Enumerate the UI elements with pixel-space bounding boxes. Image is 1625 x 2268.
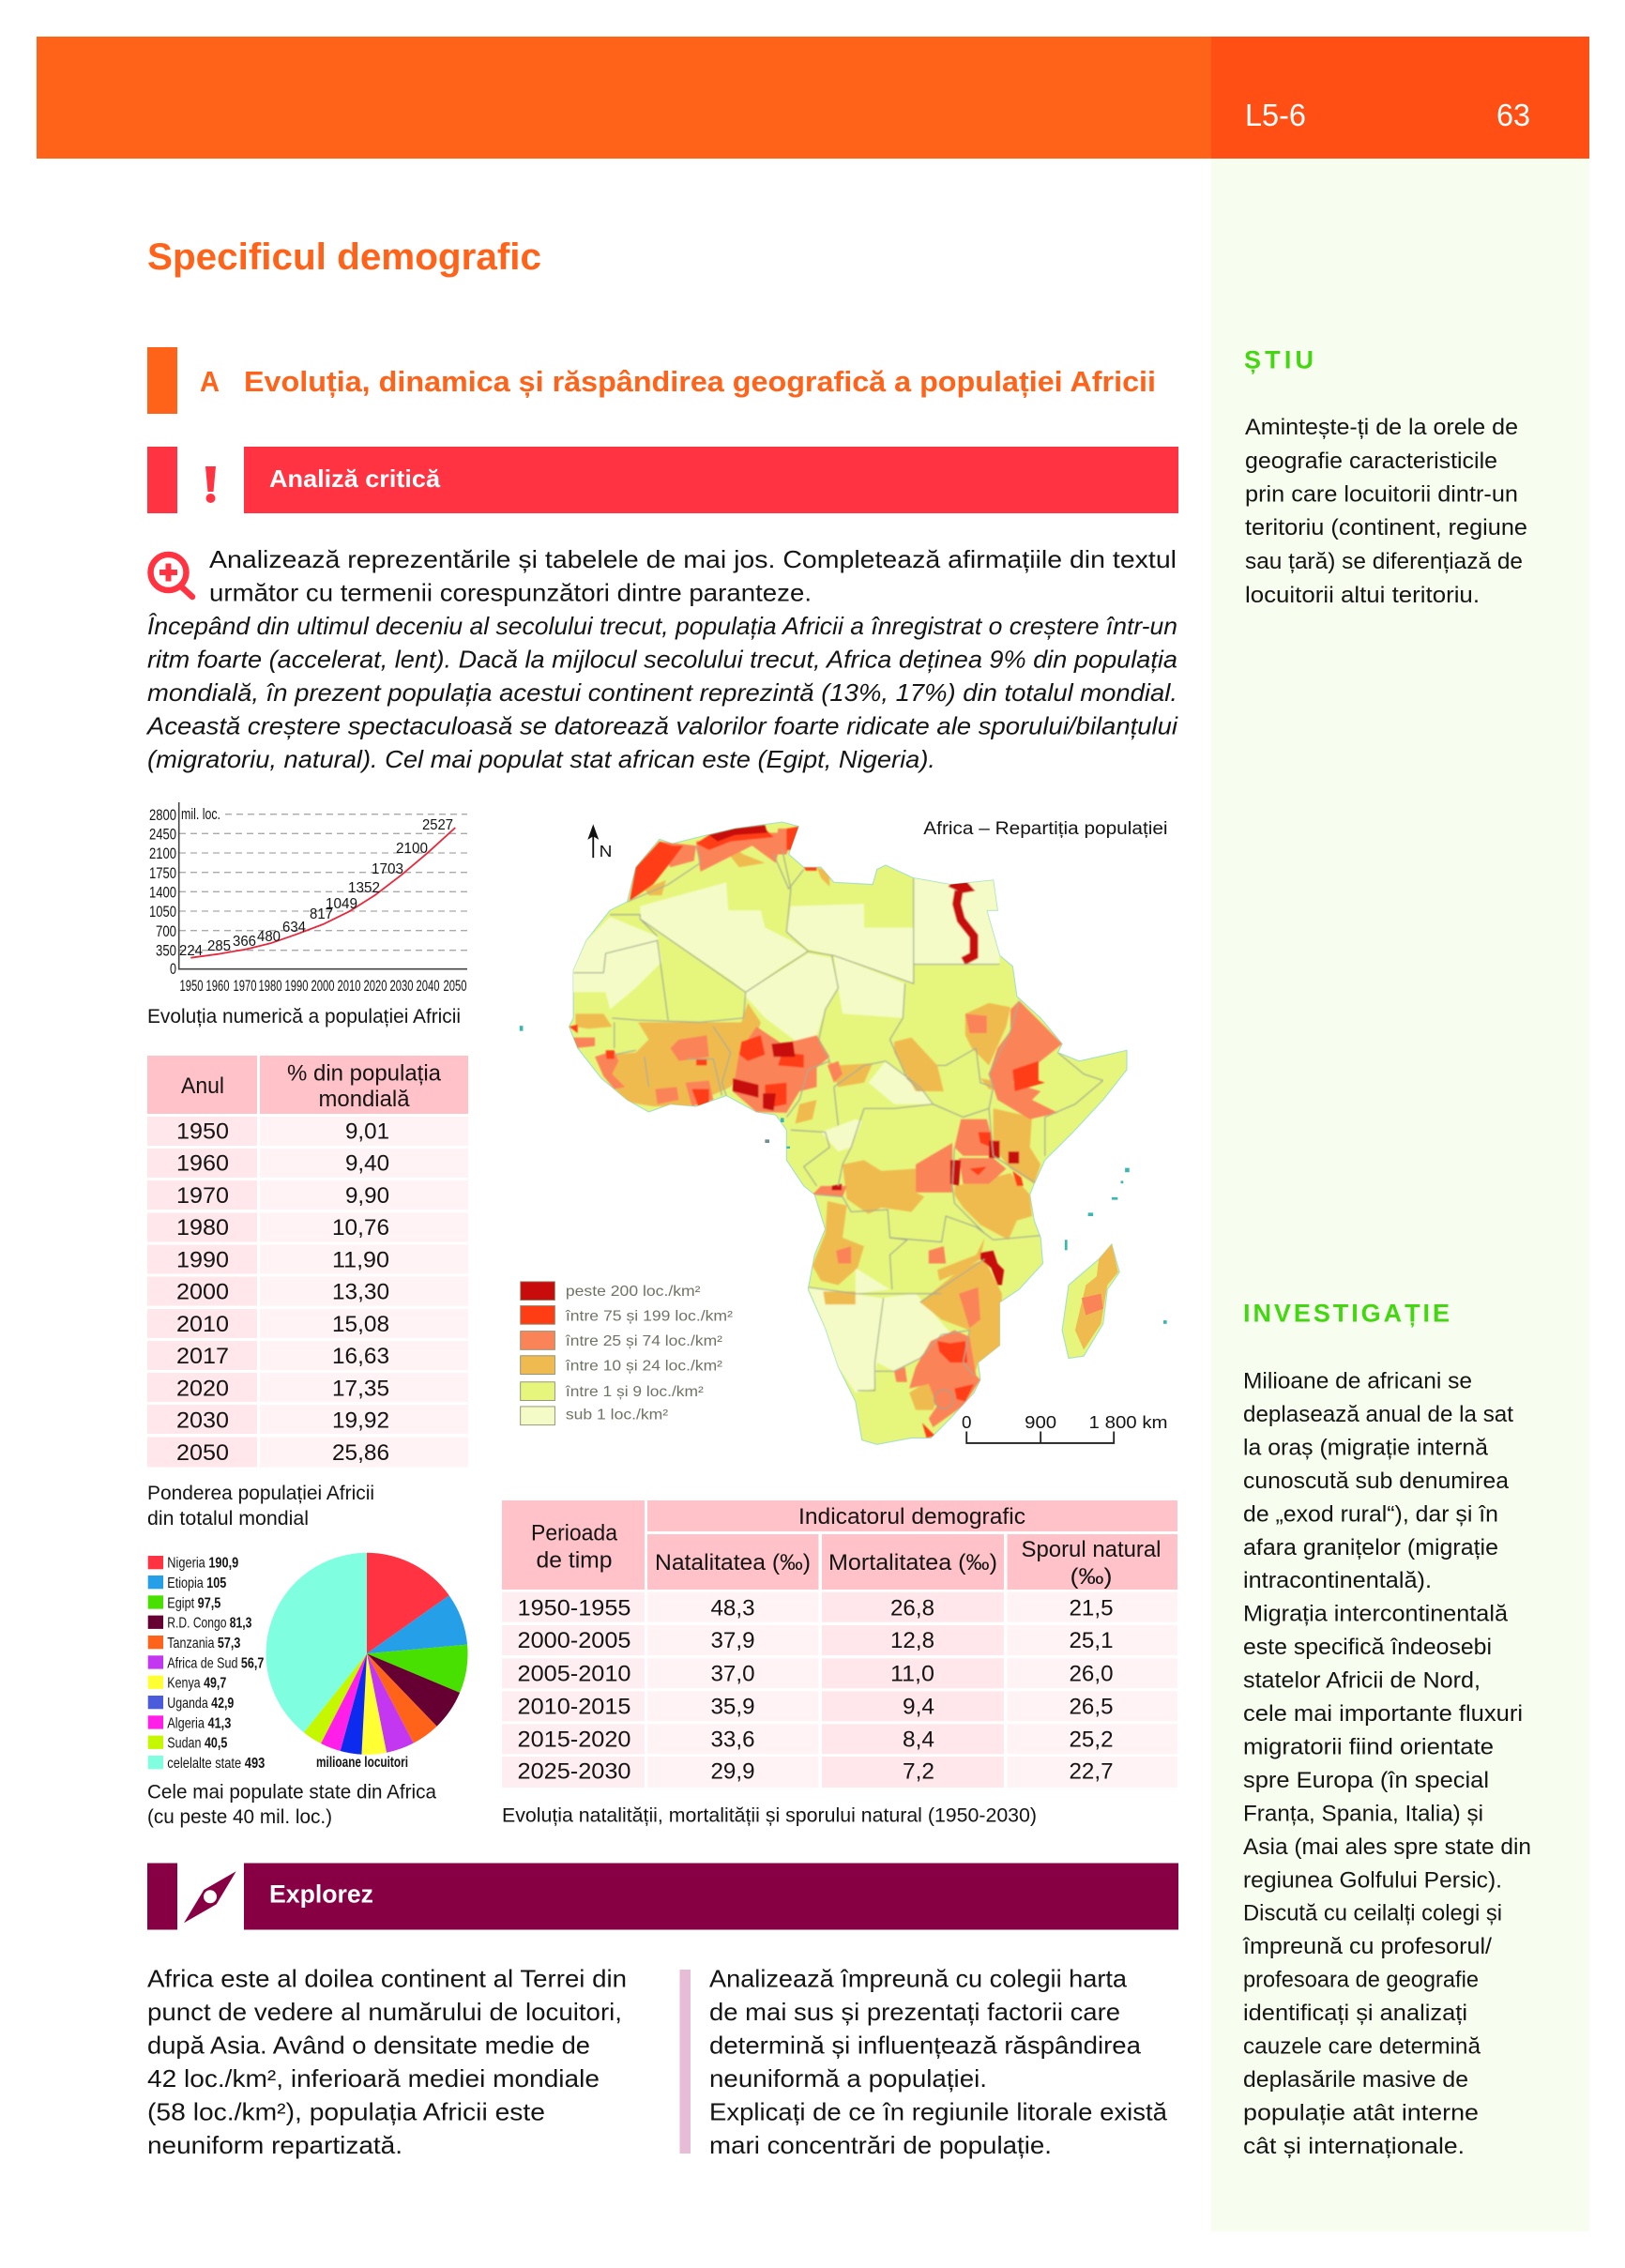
table: share of world population: 2000 xyxy=(176,1280,229,1305)
table: demographic indicators: Perioada xyxy=(531,1521,618,1546)
explore text right: Explicați de ce în regiunile litorale există xyxy=(709,2098,1168,2126)
map legend xyxy=(521,1282,733,1425)
sidebar text: INVESTIGAȚIE: identificați și analizați xyxy=(1243,2001,1467,2026)
top banner xyxy=(37,37,1589,159)
table: share of world population: 9,40 xyxy=(345,1151,389,1177)
sidebar text: INVESTIGAȚIE: Asia (mai ales spre state din xyxy=(1243,1834,1531,1860)
sidebar text: ȘTIU: locuitorii altui teritoriu. xyxy=(1245,583,1480,608)
line chart: population growth: 817 xyxy=(310,906,333,922)
density regions xyxy=(570,825,1103,1438)
line chart: population growth: 2030 xyxy=(390,977,413,995)
sidebar text: INVESTIGAȚIE: împreună cu profesorul/ xyxy=(1242,1934,1492,1959)
table: demographic indicators: 37,0 xyxy=(711,1662,754,1687)
north arrow: N xyxy=(600,842,612,860)
sidebar text: INVESTIGAȚIE: statelor Africii de Nord, xyxy=(1243,1668,1481,1693)
table: share of world population: 1990 xyxy=(176,1247,229,1272)
line chart: population growth: 2010 xyxy=(338,977,360,995)
line chart: population growth: 2050 xyxy=(443,977,467,995)
explore text left: punct de vedere al numărului de locuitori, xyxy=(147,1998,622,2026)
sidebar text: INVESTIGAȚIE: spre Europa (în special xyxy=(1243,1768,1489,1793)
scale bar xyxy=(962,1412,1168,1443)
icon: magnifier xyxy=(150,555,192,597)
map legend: sub 1 loc./km² xyxy=(566,1408,668,1423)
sidebar text: INVESTIGAȚIE xyxy=(1242,1368,1531,2159)
sidebar text: ȘTIU: teritoriu (continent, regiune xyxy=(1245,515,1527,540)
table: share of world population: Anul xyxy=(181,1073,224,1099)
table: share of world population: mondială xyxy=(319,1087,410,1112)
line chart: population growth: 2450 xyxy=(149,826,176,843)
sidebar text: INVESTIGAȚIE: Migrația intercontinentală xyxy=(1243,1602,1509,1627)
table: share of world population: 1960 xyxy=(176,1151,229,1177)
explore text right: determină și influențează răspândirea xyxy=(709,2031,1142,2059)
table: share of world population: % din populația xyxy=(287,1060,442,1087)
top banner: 63 xyxy=(1496,98,1530,132)
pie chart: most populated states xyxy=(266,1553,468,1771)
intro instructions: Analizează reprezentările și tabelele de mai jos. Completează afirmațiile din textul xyxy=(209,545,1177,573)
title: Specificul demografic xyxy=(147,236,541,278)
table: demographic indicators: 8,4 xyxy=(903,1728,934,1753)
table: demographic indicators: Natalitatea (‰) xyxy=(655,1550,811,1575)
pie caption: Cele mai populate state din Africa xyxy=(147,1782,436,1804)
banner: Explorez: Explorez xyxy=(269,1880,373,1909)
sidebar text: INVESTIGAȚIE: intracontinentală). xyxy=(1243,1568,1432,1593)
pie legend: Uganda 42,9 xyxy=(167,1696,234,1712)
map legend: între 1 și 9 loc./km² xyxy=(565,1384,704,1400)
side panel background xyxy=(1211,159,1589,2231)
line chart: population growth: 1950 xyxy=(180,977,203,995)
chart caption: Evoluția numerică a populației Africii xyxy=(147,1006,461,1027)
line chart: population growth: 366 xyxy=(233,934,256,950)
section heading A xyxy=(147,347,1156,414)
line chart: population growth: 634 xyxy=(282,920,306,936)
intro instructions: următor cu termenii corespunzători dintre paranteze. xyxy=(209,578,812,606)
pie legend: Nigeria 190,9 xyxy=(167,1556,238,1572)
Madagascar xyxy=(1062,1244,1119,1359)
sidebar text: INVESTIGAȚIE: deplasările masive de xyxy=(1243,2067,1468,2093)
table: share of world population: 25,86 xyxy=(332,1440,389,1466)
explore text left: Africa este al doilea continent al Terrei din xyxy=(147,1965,627,1993)
pie legend: Kenya 49,7 xyxy=(167,1676,226,1692)
table: demographic indicators: 21,5 xyxy=(1070,1596,1113,1621)
intro instructions xyxy=(209,545,1177,606)
italic exercise text: ritm foarte (accelerat, lent). Dacă la mijlocul secolului trecut, Africa deținea 9% din populația xyxy=(147,646,1177,674)
line chart: population growth: 1750 xyxy=(149,864,176,882)
section heading A: Evoluția, dinamica și răspândirea geografică a populației Africii xyxy=(244,365,1156,398)
sidebar heading: INVESTIGAȚIE: INVESTIGAȚIE xyxy=(1243,1299,1450,1327)
italic exercise text: Începând din ultimul deceniu al secolului trecut, populația Africii a înregistrat o creștere într-un xyxy=(147,612,1177,640)
sidebar text: INVESTIGAȚIE: cât și internaționale. xyxy=(1243,2134,1465,2159)
explore text left: neuniform repartizată. xyxy=(147,2131,402,2159)
table: share of world population: 1950 xyxy=(176,1119,229,1144)
map legend: între 25 și 74 loc./km² xyxy=(565,1333,722,1349)
pie legend: Tanzania 57,3 xyxy=(167,1636,240,1652)
sidebar text: INVESTIGAȚIE: afara granițelor (migrație xyxy=(1243,1535,1498,1560)
sidebar text: INVESTIGAȚIE: profesoara de geografie xyxy=(1243,1968,1479,1993)
scale bar: 900 xyxy=(1025,1412,1056,1432)
line chart: population growth: 2527 xyxy=(422,817,453,833)
sidebar text: INVESTIGAȚIE: cele mai importante fluxuri xyxy=(1243,1701,1523,1727)
line chart: population growth: 1980 xyxy=(259,977,281,995)
sidebar text: INVESTIGAȚIE: Franța, Spania, Italia) și xyxy=(1243,1801,1483,1826)
line chart: population growth: 224 xyxy=(179,943,203,959)
explore text left: (58 loc./km²), populația Africii este xyxy=(147,2098,545,2126)
sidebar text: INVESTIGAȚIE: la oraș (migrație internă xyxy=(1243,1436,1489,1460)
sidebar text: INVESTIGAȚIE: Discută cu ceilalți colegi și xyxy=(1243,1901,1502,1926)
table: share of world population: 9,90 xyxy=(345,1183,389,1209)
sidebar text: INVESTIGAȚIE: Milioane de africani se xyxy=(1243,1368,1472,1394)
pie legend xyxy=(148,1556,265,1772)
line chart: population growth: 2040 xyxy=(417,977,439,995)
sidebar text: INVESTIGAȚIE: populație atât interne xyxy=(1243,2100,1479,2125)
line chart: population growth: mil. loc. xyxy=(181,805,220,823)
table: demographic indicators: 2015-2020 xyxy=(518,1728,630,1753)
explore text right: Analizează împreună cu colegii harta xyxy=(709,1965,1128,1993)
sidebar text: INVESTIGAȚIE: de „exod rural“), dar și în xyxy=(1243,1501,1498,1527)
country borders xyxy=(573,845,1103,1391)
small islands xyxy=(520,1026,1167,1324)
table: demographic indicators: 2005-2010 xyxy=(518,1662,630,1687)
divider bar xyxy=(679,1970,691,2154)
explore text right: mari concentrări de populație. xyxy=(709,2131,1052,2159)
table: demographic indicators: 12,8 xyxy=(890,1628,934,1653)
table: demographic indicators: 33,6 xyxy=(711,1728,754,1753)
table: demographic indicators: 1950-1955 xyxy=(518,1596,630,1621)
line chart: population growth: 1050 xyxy=(149,903,176,921)
table: demographic indicators xyxy=(502,1500,1177,1788)
table: demographic indicators: Sporul natural xyxy=(1021,1537,1162,1562)
explore text right xyxy=(709,1965,1168,2159)
sidebar text: ȘTIU: prin care locuitorii dintr-un xyxy=(1245,482,1518,507)
pie caption xyxy=(147,1782,436,1828)
table: demographic indicators: 2000-2005 xyxy=(518,1628,630,1653)
line chart: population growth: 1703 xyxy=(372,861,403,877)
table: share of world population: 2020 xyxy=(176,1376,229,1401)
italic exercise text: mondială, în prezent populația acestui continent reprezintă (13%, 17%) din totalul mondial. xyxy=(147,678,1177,707)
line chart: population growth: 350 xyxy=(156,942,176,959)
table: demographic indicators: 26,8 xyxy=(890,1596,934,1621)
table: share of world population: 16,63 xyxy=(332,1344,389,1369)
table: demographic indicators: 7,2 xyxy=(903,1759,934,1785)
line chart: population growth: 1400 xyxy=(149,884,176,901)
table: share of world population: 15,08 xyxy=(332,1312,389,1337)
explore text right: neuniformă a populației. xyxy=(709,2064,987,2093)
sidebar text: ȘTIU: geografie caracteristicile xyxy=(1245,449,1497,474)
italic exercise text: Această creștere spectaculoasă se datorează valorilor foarte ridicate ale sporului/bilanțului xyxy=(145,711,1178,739)
table: share of world population: 17,35 xyxy=(332,1376,389,1401)
table: demographic indicators: 2010-2015 xyxy=(518,1695,630,1720)
line chart: population growth: 1990 xyxy=(285,977,308,995)
italic exercise text xyxy=(145,612,1178,773)
table: demographic indicators: 22,7 xyxy=(1070,1759,1113,1785)
sidebar text: INVESTIGAȚIE: deplasează anual de la sat xyxy=(1243,1402,1513,1427)
table: demographic indicators: Indicatorul demografic xyxy=(798,1504,1025,1530)
table: share of world population: 9,01 xyxy=(345,1119,389,1144)
table: share of world population: 1980 xyxy=(176,1215,229,1241)
line chart: population growth: 480 xyxy=(257,929,281,945)
line chart: population growth: 1960 xyxy=(206,977,229,995)
section heading A: A xyxy=(200,365,220,398)
table: share of world population: 1970 xyxy=(176,1183,229,1209)
sidebar text: INVESTIGAȚIE: migratorii fiind orientate xyxy=(1243,1734,1494,1760)
table: demographic indicators: (‰) xyxy=(1070,1564,1113,1590)
line chart: population growth xyxy=(149,802,467,995)
sidebar text: INVESTIGAȚIE: este specifică îndeosebi xyxy=(1243,1635,1492,1660)
table: share of world population: 10,76 xyxy=(332,1215,389,1241)
pie legend: Africa de Sud 56,7 xyxy=(167,1655,264,1671)
table: share of world population: 19,92 xyxy=(332,1408,389,1434)
sidebar heading: ȘTIU: ȘTIU xyxy=(1244,345,1314,373)
table: demographic indicators: 9,4 xyxy=(903,1695,934,1720)
pie legend: Etiopia 105 xyxy=(167,1575,226,1591)
north arrow xyxy=(587,824,612,860)
sidebar text: INVESTIGAȚIE: regiunea Golfului Persic). xyxy=(1243,1867,1502,1893)
explore text left: după Asia. Având o densitate medie de xyxy=(147,2031,590,2059)
pie legend: Sudan 40,5 xyxy=(167,1736,227,1752)
table: demographic indicators: 11,0 xyxy=(890,1662,934,1687)
line chart: population growth: 1049 xyxy=(326,896,357,912)
table caption: Ponderea populației Africii xyxy=(147,1483,374,1504)
line chart: population growth: 700 xyxy=(156,922,176,940)
line chart: population growth: 1970 xyxy=(233,977,257,995)
table: demographic indicators: 25,1 xyxy=(1070,1628,1113,1653)
line chart: population growth: 285 xyxy=(207,938,231,954)
line chart: population growth: 2100 xyxy=(149,845,176,862)
explore text left xyxy=(147,1965,627,2159)
pie legend: Egipt 97,5 xyxy=(167,1595,220,1611)
map legend: între 75 și 199 loc./km² xyxy=(565,1309,733,1325)
table: share of world population: 2017 xyxy=(176,1344,229,1369)
line chart: population growth: 0 xyxy=(170,960,176,978)
sidebar text: ȘTIU xyxy=(1245,415,1527,608)
sidebar text: ȘTIU: sau țară) se diferențiază de xyxy=(1245,549,1523,574)
pie legend: celelalte state 493 xyxy=(167,1756,265,1772)
banner: Analiză critică: Analiză critică xyxy=(269,464,441,493)
line chart: population growth: 2800 xyxy=(149,806,176,824)
line chart: population growth: 2020 xyxy=(364,977,387,995)
table: share of world population: 13,30 xyxy=(332,1280,389,1305)
line chart: population growth: 2100 xyxy=(396,841,428,857)
table: demographic indicators: 35,9 xyxy=(711,1695,754,1720)
pie legend: R.D. Congo 81,3 xyxy=(167,1616,251,1632)
table: demographic indicators: 25,2 xyxy=(1070,1728,1113,1753)
table: demographic indicators: 2025-2030 xyxy=(518,1759,630,1785)
table: demographic indicators: 26,5 xyxy=(1070,1695,1113,1720)
continent fill xyxy=(570,822,1127,1444)
map: Africa population density xyxy=(520,818,1168,1444)
map legend: peste 200 loc./km² xyxy=(566,1284,701,1300)
table: share of world population: 2050 xyxy=(176,1440,229,1466)
table: demographic indicators: 48,3 xyxy=(711,1596,754,1621)
top banner: L5-6 xyxy=(1245,98,1306,132)
explore text right: de mai sus și prezentați factorii care xyxy=(709,1998,1120,2026)
table: share of world population: 11,90 xyxy=(332,1247,389,1272)
scale bar: 0 xyxy=(962,1412,971,1432)
sidebar text: INVESTIGAȚIE: cauzele care determină xyxy=(1243,2034,1481,2059)
explore text left: 42 loc./km², inferioară mediei mondiale xyxy=(147,2064,600,2093)
sidebar text: INVESTIGAȚIE: cunoscută sub denumirea xyxy=(1243,1469,1510,1494)
table: share of world population: 2010 xyxy=(176,1312,229,1337)
map legend: între 10 și 24 loc./km² xyxy=(565,1358,722,1374)
table: share of world population: 2030 xyxy=(176,1408,229,1434)
line chart: population growth: 1352 xyxy=(348,880,380,896)
line chart: population growth: 2000 xyxy=(311,977,334,995)
italic exercise text: (migratoriu, natural). Cel mai populat stat african este (Egipt, Nigeria). xyxy=(147,745,935,773)
sidebar text: ȘTIU: Amintește-ți de la orele de xyxy=(1245,415,1518,440)
table: demographic indicators: 26,0 xyxy=(1070,1662,1113,1687)
pie chart: most populated states: milioane locuitori xyxy=(316,1755,408,1771)
table: share of world population xyxy=(147,1056,468,1468)
map title: Africa – Repartiția populației xyxy=(923,818,1168,839)
table: demographic indicators: 29,9 xyxy=(711,1759,754,1785)
table caption xyxy=(147,1483,374,1530)
table: demographic indicators: 37,9 xyxy=(711,1628,754,1653)
table caption: din totalul mondial xyxy=(147,1508,309,1530)
table: demographic indicators: Mortalitatea (‰) xyxy=(828,1550,997,1575)
pie caption: (cu peste 40 mil. loc.) xyxy=(147,1806,332,1828)
scale bar: 1 800 km xyxy=(1089,1412,1168,1432)
banner: Analiză critică xyxy=(147,447,1178,513)
banner: Explorez xyxy=(147,1864,1178,1929)
pie legend: Algeria 41,3 xyxy=(167,1715,231,1731)
table: demographic indicators: de timp xyxy=(537,1548,612,1574)
demographic table caption: Evoluția natalității, mortalității și sporului natural (1950-2030) xyxy=(502,1805,1037,1827)
